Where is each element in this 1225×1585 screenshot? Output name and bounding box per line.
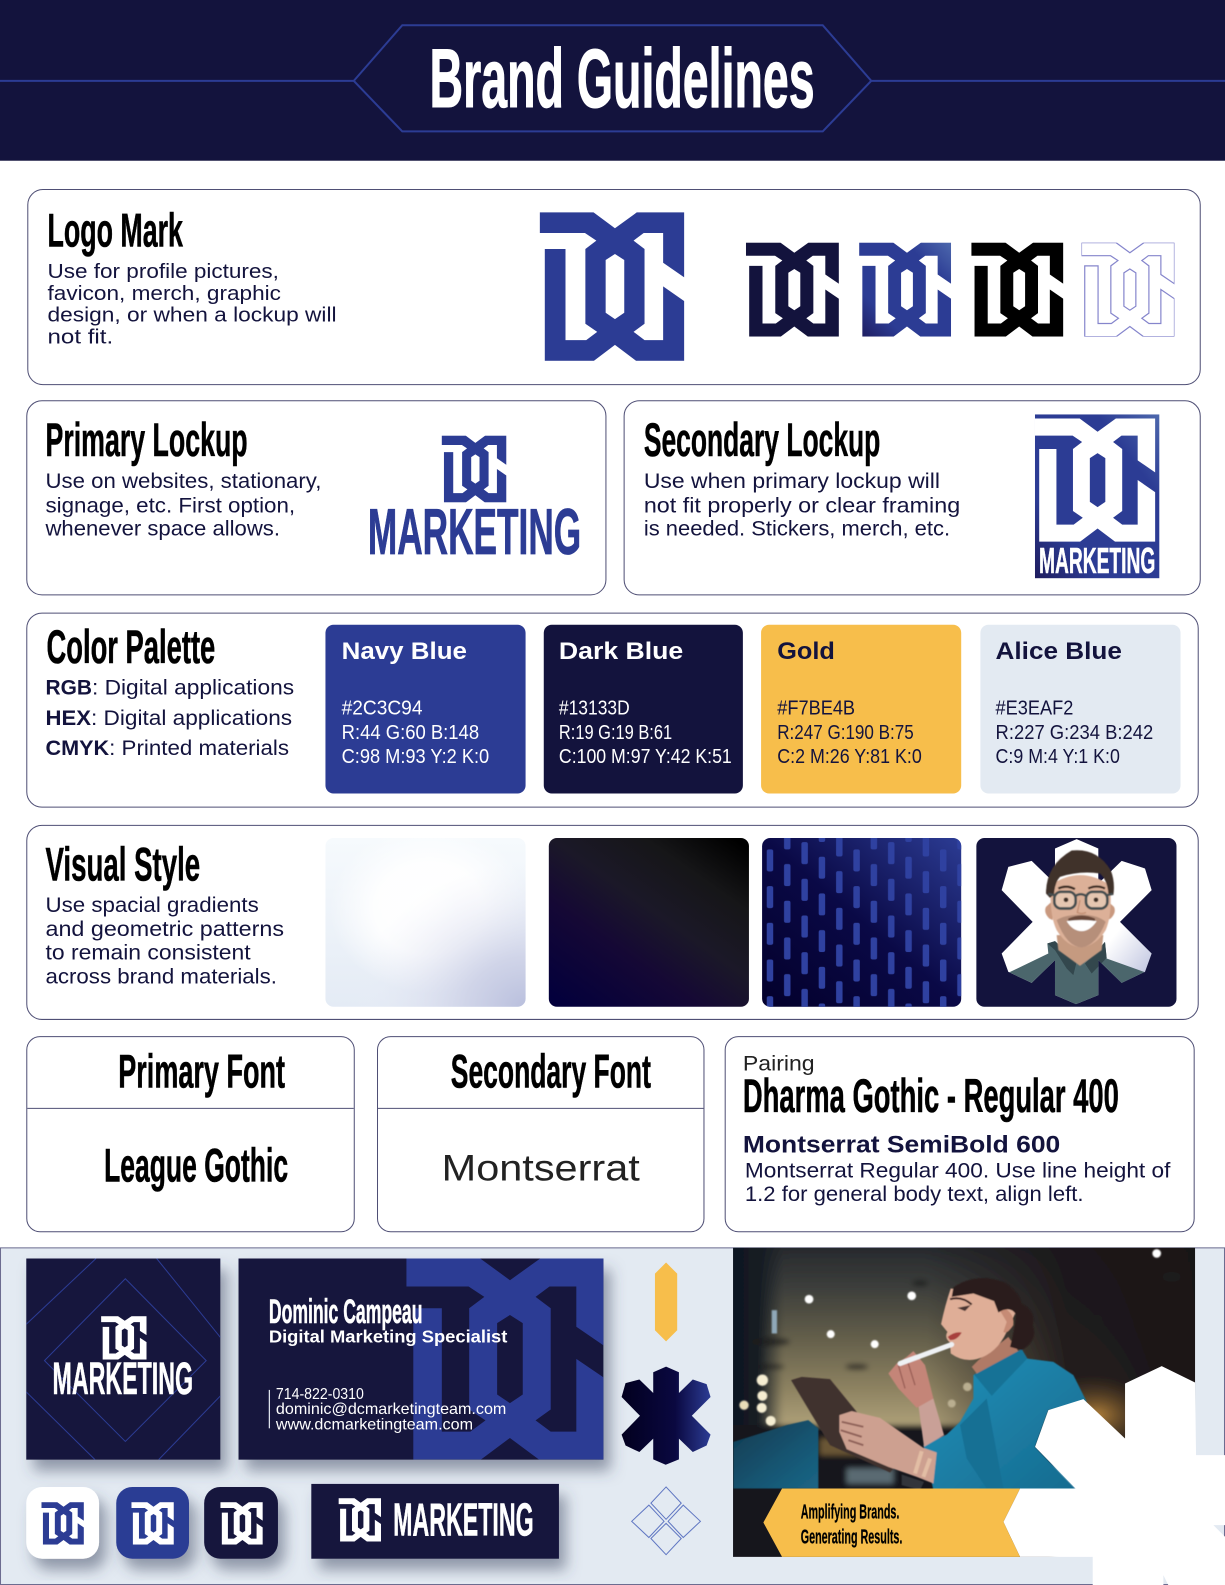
title: Brand Guidelines [430,31,815,125]
logo: dark blue [746,243,839,337]
application: square card [26,1258,220,1460]
primary lockup logo: MARKETING [368,495,581,568]
swatch: navy blue: C:98 M:93 Y:2 K:0 [342,746,489,768]
logo: large navy [540,212,684,361]
swatch: gold: C:2 M:26 Y:81 K:0 [777,746,922,768]
secondary lockup description: is needed. Stickers, merch, etc. [644,518,950,541]
visual style description [45,894,284,989]
pairing body sample: 1.2 for general body text, align left. [745,1183,1083,1206]
primary lockup description: signage, etc. First option, [45,494,295,517]
shape: navy asterisk [622,1367,711,1465]
tagline [801,1501,902,1549]
swatch: gold [761,625,961,794]
logo mark description [48,261,337,349]
swatch: gold: R:247 G:190 B:75 [777,722,914,744]
swatch: navy blue [325,625,526,794]
white asterisk cutout [1003,1366,1225,1585]
swatch: navy blue: R:44 G:60 B:148 [342,722,479,744]
application: photo ad [720,1238,1225,1585]
logo mark description: Use for profile pictures, [48,261,279,283]
application: business card: Digital Marketing Specialist [269,1326,508,1346]
panel: primary lockup [27,401,606,595]
visual style description: to remain consistent [45,941,251,964]
application: horizontal lockup banner: MARKETING [393,1493,534,1545]
header banner [0,0,1225,161]
gold tagline banner [763,1489,1020,1557]
swatch: alice blue: R:227 G:234 B:242 [996,722,1153,744]
swatch: dark blue [544,625,743,794]
color usage notes: : Digital applications [91,707,292,730]
application: business card: 714-822-0310 [276,1386,364,1403]
heading: secondary lockup: Secondary Lockup [644,414,880,467]
secondary lockup logo [1035,414,1159,581]
pairing label: Pairing [743,1052,815,1075]
app icon: dark [204,1487,278,1559]
logo: gradient [859,243,951,337]
swatch: dark blue: Dark Blue [559,638,683,665]
color usage notes: RGB [45,676,92,699]
font sample: league gothic: League Gothic [104,1140,288,1193]
swatch: alice blue: C:9 M:4 Y:1 K:0 [996,746,1120,768]
woman figure [733,1278,1087,1490]
primary lockup logo [368,436,581,568]
app icon: navy [116,1487,189,1559]
tile: dark gradient [549,838,749,1007]
application: business card: www.dcmarketingteam.com [275,1416,473,1433]
photo background [720,1238,1207,1565]
tile: portrait in asterisk [976,838,1176,1009]
primary lockup description [44,470,321,541]
swatch: alice blue: #E3EAF2 [996,698,1073,720]
logo mark description: design, or when a lockup will [48,304,337,326]
swatch: alice blue: Alice Blue [996,638,1122,665]
application: business card: Dominic Campeau [269,1293,422,1331]
heading: primary font: Primary Font [118,1046,285,1099]
panel: brand applications [0,1238,1225,1585]
pairing body sample: Montserrat Regular 400. Use line height of [745,1160,1171,1183]
pairing subheading sample: Montserrat SemiBold 600 [743,1131,1060,1158]
heading: secondary font: Secondary Font [451,1046,651,1099]
tile: dash pattern [762,838,961,1007]
secondary lockup description [644,470,960,541]
primary lockup description: whenever space allows. [44,518,280,541]
pairing body sample [745,1160,1171,1206]
tagline: Amplifying Brands. [801,1501,899,1524]
color usage notes: : Printed materials [109,737,289,760]
header hexagon frame [354,25,871,131]
visual style description: Use spacial gradients [45,894,259,917]
panel: color palette [27,613,1198,807]
application: square card: MARKETING [53,1353,193,1404]
tile: light gradient [325,838,526,1007]
secondary lockup description: Use when primary lockup will [644,470,940,493]
logo mark description: favicon, merch, graphic [48,283,281,305]
logo: black [971,243,1063,337]
color usage notes: CMYK [45,737,110,760]
panel: secondary lockup [624,401,1200,595]
swatch: alice blue [980,625,1181,794]
primary lockup description: Use on websites, stationary, [45,470,321,493]
swatch: dark blue: R:19 G:19 B:61 [559,722,672,744]
panel: secondary font [378,1037,704,1232]
application: business card: dominic@dcmarketingteam.com [276,1401,506,1418]
app icon: white [26,1487,99,1559]
color usage notes: HEX [45,707,91,730]
tagline: Generating Results. [801,1526,902,1549]
secondary lockup description: not fit properly or clear framing [644,494,960,517]
visual style description: across brand materials. [45,966,277,989]
shape: gold hexagon [655,1263,677,1341]
visual style description: and geometric patterns [45,918,284,941]
swatch: gold: Gold [777,638,835,665]
panel: font pairing [725,1037,1194,1232]
color usage notes: : Digital applications [92,676,294,699]
swatch: navy blue: Navy Blue [342,638,467,665]
heading: visual style: Visual Style [45,838,200,891]
logo: outline [1081,243,1174,337]
heading: primary lockup: Primary Lockup [45,414,248,467]
panel: logo mark [28,190,1200,385]
heading: logo mark: Logo Mark [48,205,183,258]
font sample: montserrat: Montserrat [442,1147,640,1189]
logo mark description: not fit. [48,327,113,349]
panel: primary font [27,1037,354,1232]
swatch: dark blue: #13133D [559,698,630,720]
heading: color palette: Color Palette [46,621,215,674]
ceiling lights [739,1249,1161,1426]
application: business card [239,1258,605,1460]
color usage notes [45,676,294,760]
shape: diamond outlines [632,1487,700,1555]
swatch: dark blue: C:100 M:97 Y:42 K:51 [559,746,732,768]
swatch: gold: #F7BE4B [777,698,855,720]
application: horizontal lockup banner [311,1484,559,1559]
panel: visual style [27,825,1198,1019]
swatch: navy blue: #2C3C94 [342,698,422,720]
